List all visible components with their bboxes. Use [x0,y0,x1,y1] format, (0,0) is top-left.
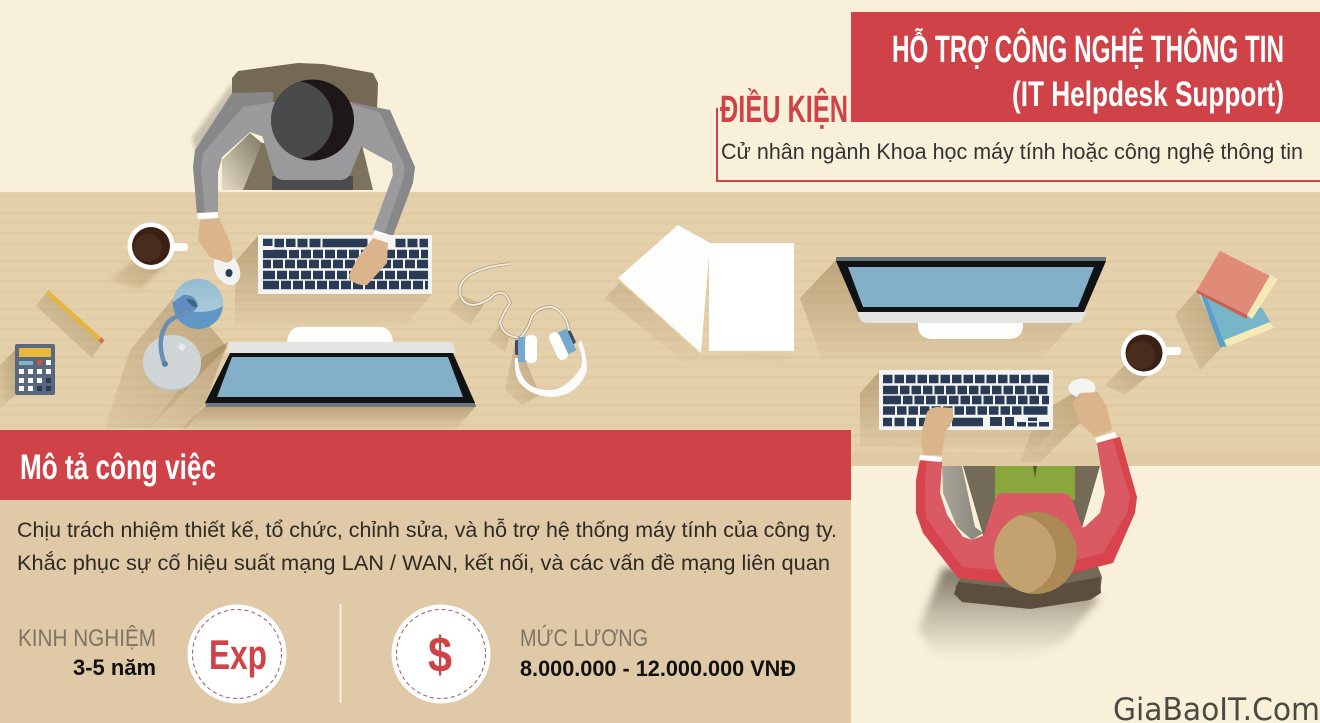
screen [217,357,463,397]
headphones with cable [460,264,587,397]
bezel [205,353,475,403]
keyboard right [879,370,1053,430]
screen [848,267,1094,307]
edge [205,403,476,407]
cuffs [197,212,218,219]
shadows: right desk items [605,260,1222,462]
base [857,311,1087,323]
right arm outer [1065,437,1137,575]
chair seat [243,143,373,190]
description text [17,519,837,575]
shadow beside arm [942,466,983,540]
hand on mouse [1072,392,1112,437]
red book [1197,251,1270,315]
left arm outer [916,460,1003,583]
shirt seam [1033,466,1037,478]
left arm inner [925,460,998,570]
desk lamp [143,279,223,391]
books [1197,251,1278,347]
description text: Khắc phục sự cố hiệu suất mạng LAN / WAN, kết nối, và các vấn đề mạng liên quan [17,552,830,575]
illustration: man in red at desk [916,378,1137,660]
icon: salary badge: $ [428,627,452,683]
hand on keyboard [921,407,953,455]
stand [918,323,1023,339]
panel: requirements [717,87,1320,181]
green shirt [995,466,1075,500]
right arm inner [1065,440,1130,563]
computer monitor left [205,327,476,407]
salary label: MỨC LƯƠNG [520,625,648,652]
shadows: left desk items [0,236,540,430]
heading: requirements: ĐIỀU KIỆN [720,87,848,131]
right arm inner [350,103,405,232]
heading: job description: Mô tả công việc [20,448,216,487]
experience label [18,625,156,680]
icon: salary badge [392,604,490,704]
floor shadow [918,568,1100,660]
base [226,342,456,353]
right arm outer [350,102,415,236]
bezel [836,261,1106,312]
torso [983,493,1084,570]
papers [618,225,794,353]
paper sheet angled [618,225,710,353]
coffee cup right [1121,330,1181,376]
chair back [232,63,378,110]
chair shadow [192,83,240,165]
top edge [836,257,1106,262]
blue book [1201,295,1274,347]
hands: grey man [198,218,388,285]
left arm inner [201,102,273,213]
head [271,80,354,160]
trousers [272,176,353,190]
description text: Chịu trách nhiệm thiết kế, tổ chức, chỉnh sửa, và hỗ trợ hệ thống máy tính của công ty. [17,519,837,542]
chair body [955,466,1102,592]
chair back [954,577,1101,609]
mouse right [1068,378,1096,398]
salary label [520,625,796,681]
torso [262,102,362,180]
keyboard left [258,235,432,294]
icon: experience badge: Exp [209,631,267,678]
mouse left [208,248,246,290]
paper sheet straight [709,243,794,351]
illustration: man in grey at desk [192,63,415,242]
wooden desk [0,192,1320,466]
shadow beside arm [222,133,262,190]
head [994,512,1077,594]
cuffs [919,455,942,462]
stand [287,327,393,342]
requirement text: Cử nhân ngành Khoa học máy tính hoặc công nghệ thông tin [721,139,1303,164]
experience label: KINH NGHIỆM [18,625,156,652]
pencil [47,292,103,342]
panel: job description [0,430,851,723]
left arm outer [193,92,273,214]
title banner [851,12,1320,122]
computer monitor right [836,257,1106,339]
salary label: 8.000.000 - 12.000.000 VNĐ [520,656,796,681]
divider [340,604,342,703]
icon: experience badge [188,604,286,704]
coffee cup left [128,222,188,270]
calculator [15,344,55,395]
experience label: 3-5 năm [73,655,156,680]
